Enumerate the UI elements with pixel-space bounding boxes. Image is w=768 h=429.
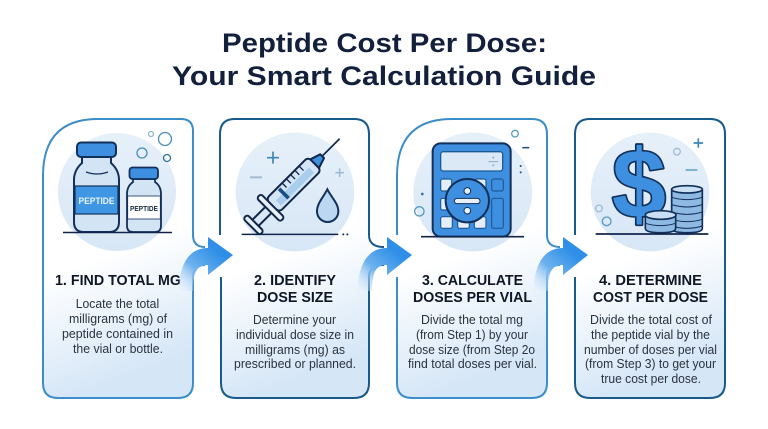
panel: step 4 determine cost per dose (575, 119, 725, 398)
title: Peptide Cost Per Dose: (222, 28, 547, 58)
title (172, 28, 596, 91)
heading: find total mg: 1. FIND TOTAL MG (55, 272, 181, 289)
text: step 3 description: dose size (from Step 2o (409, 343, 535, 357)
heading: calculate doses per vial (413, 272, 532, 306)
icon: peptide vials (58, 132, 176, 251)
icon: dollar sign and coins: $ (612, 129, 666, 238)
text: step 4 description: Divide the total cost of (590, 313, 713, 327)
arrow: step 1 to step 2 (178, 237, 233, 291)
text: step 2 description (234, 313, 356, 371)
icon: calculator (413, 130, 532, 251)
heading: determine cost per dose (593, 272, 708, 306)
text: step 4 description: true cost per dose. (601, 372, 701, 386)
text: step 1 description: milligrams (mg) of (69, 312, 168, 326)
icon: dollar sign and coins (591, 129, 709, 251)
icon: syringe and droplet (236, 127, 354, 251)
text: step 3 description: find total doses per vial. (408, 357, 537, 371)
text: step 2 description: milligrams (mg) as (245, 343, 345, 357)
icon: peptide vials: PEPTIDE (130, 204, 158, 213)
heading: identify dose size: 2. IDENTIFY (254, 272, 336, 289)
text: step 2 description: individual dose size in (236, 328, 354, 342)
panel: step 3 calculate doses per vial (397, 119, 560, 398)
text: step 2 description: prescribed or planned. (234, 357, 356, 371)
icon: peptide vials: PEPTIDE (78, 196, 114, 206)
text: step 3 description: (from Step 1) by your (416, 328, 528, 342)
text: step 4 description: number of doses per vial (584, 343, 717, 357)
panel: step 1 find total mg (43, 119, 205, 398)
title: Your Smart Calculation Guide (172, 61, 596, 91)
text: step 1 description: peptide contained in (62, 327, 173, 341)
text: step 4 description: the peptide vial by the (591, 328, 710, 342)
text: step 1 description: the vial or bottle. (73, 342, 163, 356)
arrow: step 2 to step 3 (357, 237, 412, 291)
heading: calculate doses per vial: DOSES PER VIAL (413, 289, 532, 306)
text: step 3 description: Divide the total mg (421, 313, 523, 327)
heading: identify dose size: DOSE SIZE (257, 289, 333, 306)
text: step 2 description: Determine your (253, 313, 336, 327)
heading: calculate doses per vial: 3. CALCULATE (422, 272, 523, 289)
arrow: step 3 to step 4 (533, 237, 588, 291)
heading: determine cost per dose: 4. DETERMINE (599, 272, 702, 289)
text: step 4 description: (from Step 3) to get your (585, 357, 716, 371)
panel: step 2 identify dose size (220, 119, 384, 398)
heading: identify dose size (254, 272, 336, 306)
text: step 1 description: Locate the total (76, 297, 159, 311)
text: step 4 description (584, 313, 717, 386)
text: step 3 description (408, 313, 537, 371)
text: step 1 description (62, 297, 173, 356)
heading: determine cost per dose: COST PER DOSE (593, 289, 708, 306)
